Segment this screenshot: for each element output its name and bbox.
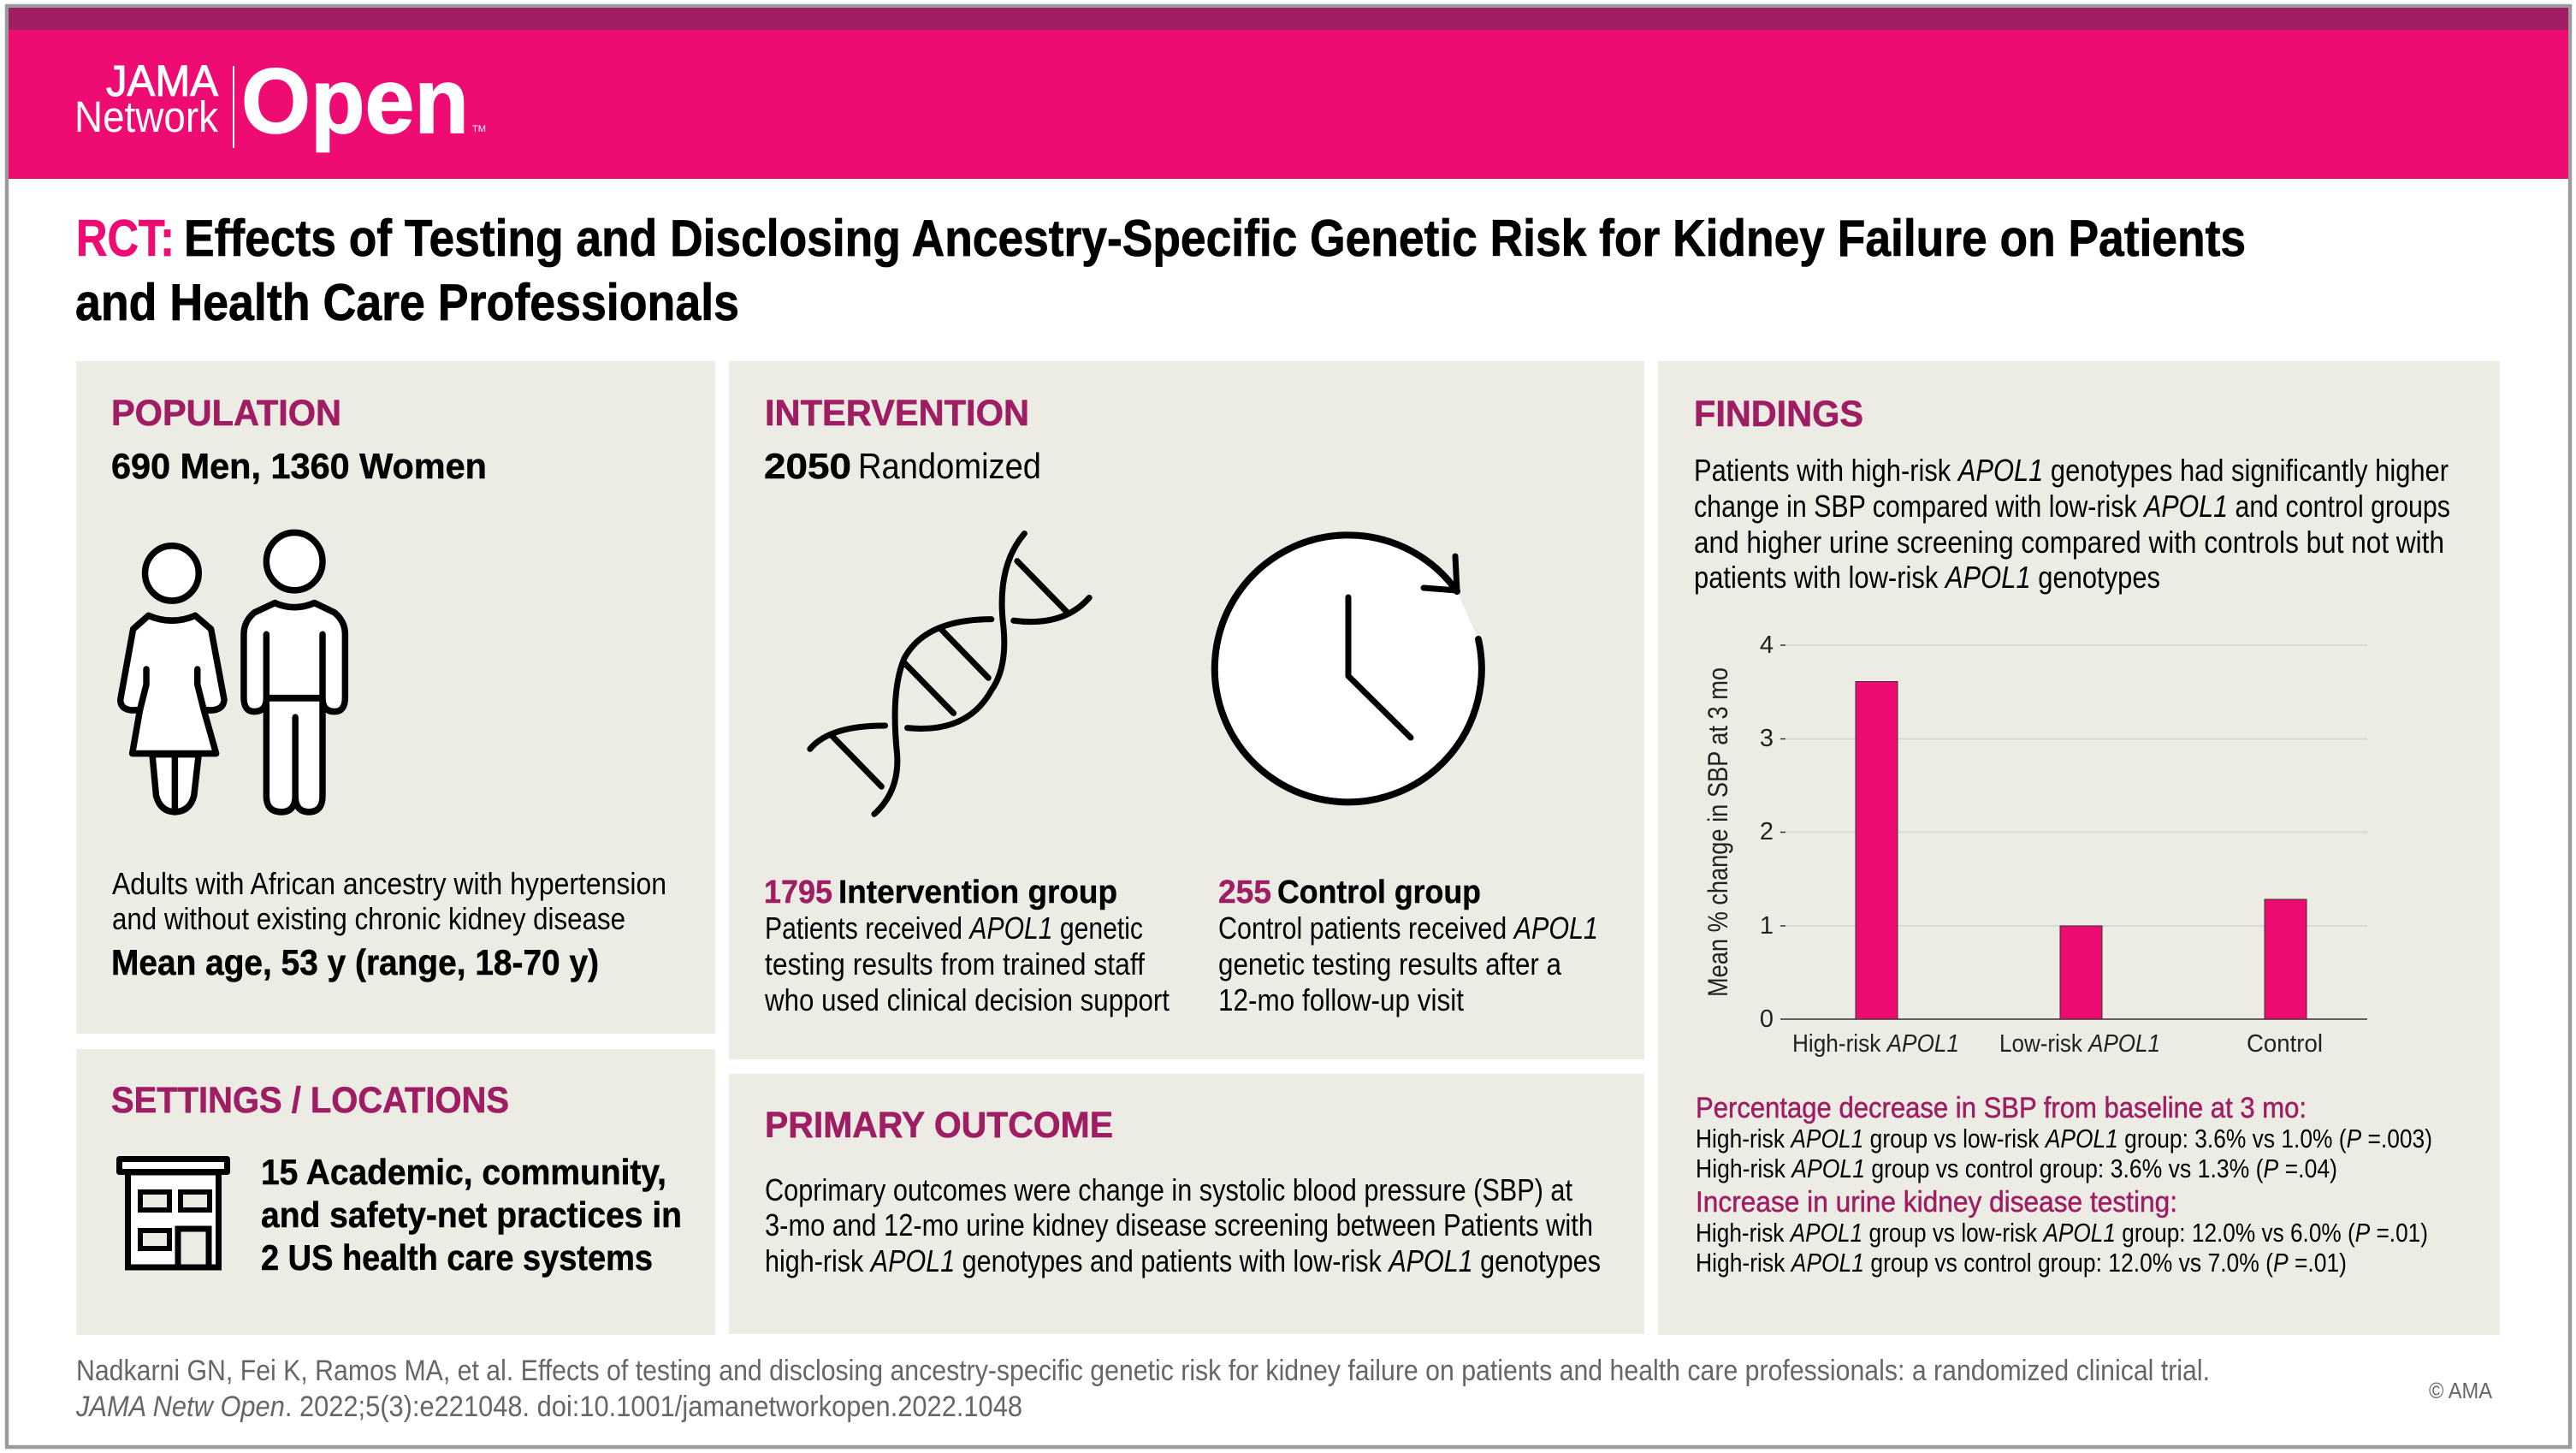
settings text: 2 US health care systems — [261, 1237, 653, 1278]
citation: JAMA Netw Open. 2022;5(3):e221048. doi:10.1001/jamanetworkopen.2022.1048 — [75, 1391, 1022, 1423]
population description: and without existing chronic kidney disease — [112, 901, 625, 936]
findings summary: patients with low-risk APOL1 genotypes — [1694, 560, 2160, 595]
citation — [75, 1355, 2210, 1423]
heading: population: POPULATION — [111, 393, 341, 434]
logo: JAMA Network Open: Open — [241, 49, 469, 152]
icon: building — [120, 1159, 228, 1267]
SBP results: High-risk APOL1 group vs low-risk APOL1 group: 3.6% vs 1.0% (P =.003) — [1696, 1124, 2432, 1154]
title: and Health Care Professionals — [75, 274, 739, 331]
panel: intervention — [729, 361, 1644, 1059]
outcome text: 3-mo and 12-mo urine kidney disease screening between Patients with — [765, 1207, 1593, 1242]
bar: control — [2265, 899, 2307, 1019]
heading: intervention: INTERVENTION — [765, 393, 1029, 434]
y-axis tick labels — [1760, 632, 1774, 1033]
title: Effects of Testing and Disclosing Ancestry-Specific Genetic Risk for Kidney Failure on Patients — [184, 210, 2246, 267]
settings text — [261, 1152, 682, 1278]
urine testing results: High-risk APOL1 group vs control group: 12.0% vs 7.0% (P =.01) — [1696, 1248, 2347, 1278]
outcome text: high-risk APOL1 genotypes and patients with low-risk APOL1 genotypes — [765, 1243, 1601, 1278]
findings summary: change in SBP compared with low-risk APOL1 and control groups — [1694, 489, 2450, 524]
bar: high-risk — [1856, 681, 1898, 1019]
settings text: and safety-net practices in — [261, 1195, 682, 1235]
SBP results: Percentage decrease in SBP from baseline at 3 mo: — [1696, 1092, 2307, 1124]
bar: low-risk — [2060, 926, 2102, 1019]
SBP results: High-risk APOL1 group vs control group: 3.6% vs 1.3% (P =.04) — [1696, 1154, 2337, 1183]
logo: JAMA Network Open — [74, 49, 486, 152]
logo: JAMA Network Open: JAMA — [106, 56, 218, 105]
panel: settings / locations — [76, 1049, 715, 1335]
population description — [112, 866, 666, 936]
heading: settings: SETTINGS / LOCATIONS — [111, 1080, 509, 1121]
panel: population — [76, 361, 715, 1034]
logo: JAMA Network Open: TM — [472, 124, 486, 134]
y-axis tick labels: 3 — [1760, 725, 1774, 752]
findings summary: Patients with high-risk APOL1 genotypes had significantly higher — [1694, 453, 2449, 488]
heading: findings: FINDINGS — [1694, 394, 1863, 435]
icon: DNA helix — [810, 533, 1089, 814]
outcome text — [765, 1172, 1601, 1278]
SBP results — [1696, 1092, 2432, 1183]
control group: 12-mo follow-up visit — [1218, 982, 1464, 1017]
intervention group — [764, 875, 1170, 1017]
copyright: © AMA — [2429, 1378, 2493, 1403]
x-axis labels: High-risk APOL1 — [1792, 1030, 1959, 1058]
outcome text: Coprimary outcomes were change in systolic blood pressure (SBP) at — [765, 1172, 1572, 1207]
findings summary — [1694, 453, 2450, 595]
bar chart — [1703, 632, 2367, 1058]
control group: Control patients received APOL1 — [1218, 910, 1598, 946]
randomized count: 2050 — [764, 446, 851, 486]
control group: Control group — [1277, 875, 1481, 910]
intervention group: Patients received APOL1 genetic — [765, 910, 1143, 946]
title: RCT: — [76, 210, 175, 267]
title — [75, 210, 2246, 331]
urine testing results: High-risk APOL1 group vs low-risk APOL1 group: 12.0% vs 6.0% (P =.01) — [1696, 1218, 2428, 1248]
x-axis labels: Control — [2247, 1030, 2323, 1058]
urine testing results: Increase in urine kidney disease testing: — [1696, 1186, 2177, 1219]
population description: Adults with African ancestry with hypertension — [112, 866, 666, 901]
intervention group: who used clinical decision support — [764, 982, 1170, 1017]
panel: primary outcome — [729, 1074, 1644, 1334]
y-axis tick labels: 4 — [1760, 632, 1774, 659]
icon: woman and man — [121, 532, 345, 812]
x-axis labels — [1792, 1030, 2323, 1058]
control group: genetic testing results after a — [1218, 946, 1562, 982]
panel: findings — [1658, 361, 2500, 1335]
header banner — [9, 8, 2568, 179]
settings text: 15 Academic, community, — [261, 1152, 666, 1192]
y-axis tick labels: 0 — [1760, 1005, 1774, 1033]
y-axis tick labels: 2 — [1760, 818, 1774, 845]
mean age: Mean age, 53 y (range, 18-70 y) — [111, 942, 599, 982]
logo: JAMA Network Open: Network — [74, 92, 218, 141]
intervention group: testing results from trained staff — [765, 946, 1146, 982]
x-axis labels: Low-risk APOL1 — [1999, 1030, 2160, 1058]
population counts: 690 Men, 1360 Women — [111, 446, 487, 486]
intervention group: 1795 — [764, 875, 832, 910]
y-axis tick labels: 1 — [1760, 912, 1774, 940]
icon: clock with arrow — [1215, 535, 1482, 802]
findings summary: and higher urine screening compared with controls but not with — [1694, 525, 2444, 560]
y-axis title: Mean % change in SBP at 3 mo — [1703, 667, 1733, 997]
randomized count: Randomized — [858, 446, 1041, 486]
citation: Nadkarni GN, Fei K, Ramos MA, et al. Effects of testing and disclosing ancestry-specific genetic risk for kidney failure on patients and health care professionals: a randomized clinical trial. — [76, 1355, 2210, 1387]
randomized count — [764, 446, 1041, 486]
urine testing results — [1696, 1186, 2428, 1278]
heading: primary outcome: PRIMARY OUTCOME — [765, 1105, 1113, 1146]
control group: 255 — [1218, 875, 1271, 910]
control group — [1218, 875, 1598, 1017]
intervention group: Intervention group — [838, 875, 1117, 910]
